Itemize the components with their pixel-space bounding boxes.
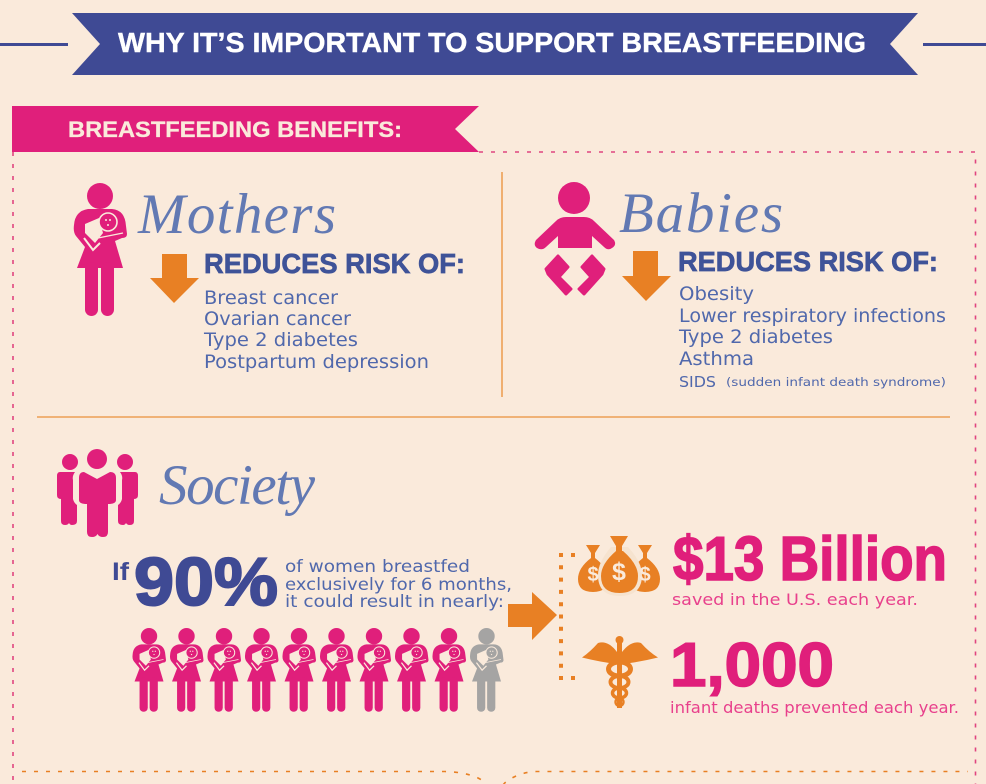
arrow: right bbox=[508, 592, 557, 640]
list: mothers risks: Type 2 diabetes bbox=[203, 329, 358, 351]
list: mothers risks: Breast cancer bbox=[204, 287, 338, 309]
list: babies risks: SIDS bbox=[679, 373, 716, 391]
list: mothers risks bbox=[203, 287, 429, 373]
list: babies risks: (sudden infant death syndrome) bbox=[726, 375, 946, 389]
statistic: 13 billion: $13 Billion bbox=[673, 525, 947, 594]
statistic: 1,000: infant deaths prevented each year. bbox=[670, 698, 959, 717]
icon: caduceus bbox=[582, 636, 658, 708]
heading: society: Society bbox=[159, 454, 316, 517]
icon: down arrow bbox=[622, 251, 671, 301]
section ribbon: breastfeeding benefits: BREASTFEEDING BENEFITS: bbox=[68, 117, 402, 142]
list: babies risks: Obesity bbox=[679, 283, 754, 305]
heading: mothers: Mothers bbox=[137, 183, 336, 246]
subheading: reduces risk: REDUCES RISK OF: bbox=[678, 246, 938, 277]
statistic: if 90%: 90% bbox=[134, 544, 278, 620]
statistic: 1,000: 1,000 bbox=[670, 631, 834, 700]
heading: babies: Babies bbox=[619, 182, 783, 245]
list: babies risks: Asthma bbox=[679, 348, 754, 370]
icon: money bags: $ bbox=[612, 558, 626, 586]
icon: baby bbox=[535, 182, 615, 294]
panel: babies bbox=[535, 182, 946, 391]
dotted panel border bbox=[13, 152, 976, 784]
bracket: dotted connector bbox=[561, 553, 575, 682]
title banner: WHY IT’S IMPORTANT TO SUPPORT BREASTFEEDING bbox=[118, 27, 866, 58]
list: mothers risks: Postpartum depression bbox=[204, 351, 429, 373]
statistic: 13 billion: saved in the U.S. each year. bbox=[672, 590, 918, 609]
list: mothers risks: Ovarian cancer bbox=[204, 308, 351, 330]
icon: group of people bbox=[57, 449, 138, 537]
list: babies risks: Type 2 diabetes bbox=[678, 326, 833, 348]
statistic: 1,000 bbox=[670, 631, 959, 717]
text: statistic description: exclusively for 6 months, bbox=[285, 575, 512, 595]
pictogram: nine of ten mothers bbox=[132, 628, 504, 712]
subheading: reduces risk: REDUCES RISK OF: bbox=[204, 248, 465, 279]
text: statistic description bbox=[285, 557, 512, 612]
icon: money bags bbox=[578, 536, 660, 596]
title banner bbox=[0, 13, 986, 75]
icon: mother holding baby bbox=[74, 183, 127, 316]
list: babies risks bbox=[678, 283, 946, 391]
icon: down arrow bbox=[150, 254, 199, 303]
icon: money bags: $ bbox=[639, 564, 651, 586]
text: statistic description: it could result in nearly: bbox=[285, 592, 504, 612]
text: statistic description: of women breastfed bbox=[285, 557, 470, 577]
list: babies risks: Lower respiratory infections bbox=[679, 305, 946, 327]
section ribbon: breastfeeding benefits bbox=[12, 106, 479, 152]
panel: mothers bbox=[74, 183, 465, 373]
icon: money bags: $ bbox=[587, 564, 599, 586]
panel: society bbox=[57, 449, 959, 717]
statistic: if 90%: If bbox=[112, 558, 130, 586]
